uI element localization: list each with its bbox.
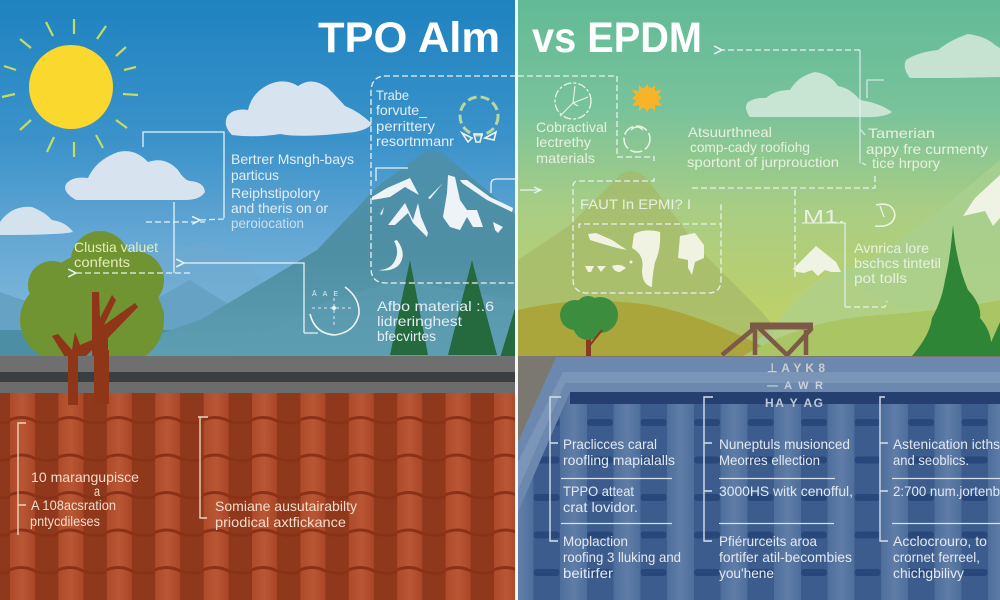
text block: Clustia: Clustia valuet: [74, 239, 158, 255]
callout: FAUT in EPMI: FAUT In EPMI? I: [580, 196, 691, 212]
text block: Atsuurthneal: comp-cady roofiohg: [690, 139, 810, 155]
roof edge: [0, 356, 516, 393]
cloud: far left: [0, 207, 73, 235]
item: Astenication: Astenication icths: [893, 436, 1000, 452]
icon: timer: [875, 204, 895, 226]
icon: sun: [2, 19, 138, 157]
item: Moplaction: Moplaction: [563, 533, 628, 549]
text block: Cobractival: lectrethy: [536, 134, 591, 150]
note: Somiane: priodical axtfickance: [215, 514, 346, 530]
item: Moplaction: beitirfer: [563, 565, 613, 581]
item: Astenication: [893, 436, 1000, 468]
text block: Tamerian: tice hrpory: [872, 155, 940, 171]
title: vs EPDM: vs EPDM: [532, 14, 702, 62]
roof base: [518, 356, 1000, 600]
cloud: centre: [746, 72, 892, 117]
hills: [518, 300, 1000, 358]
note: marangupisce: pntycdileses: [30, 513, 100, 529]
text block: Afbo material: [377, 298, 494, 344]
panel: EPDM side: [518, 0, 1000, 358]
item: Acclocrouro: crornet ferreel,: [893, 549, 980, 565]
snow caps: [372, 175, 513, 237]
icon: gauge: [310, 287, 359, 335]
roof top bands: [518, 357, 1000, 512]
small tree: [560, 296, 618, 358]
item: Pfiérurceits: you'hene: [719, 565, 774, 581]
label: M1.: M1.: [803, 207, 845, 227]
bracket: right note: [198, 417, 208, 518]
callout text: Trabe: Trabe: [376, 87, 409, 103]
column 1: [550, 397, 681, 581]
sky background: [518, 0, 1000, 358]
second pine: [985, 322, 1000, 356]
snowy peak: [963, 175, 1000, 226]
note: marangupisce: 10 marangupisce: [31, 469, 139, 485]
text block: Tamerian: Tamerian: [868, 125, 935, 141]
item: Acclocrouro: chichgbilivy: [893, 565, 964, 581]
text block: Clustia: [74, 239, 158, 270]
panel: blue roof: [518, 356, 1000, 600]
text block: Tamerian: appy fre curmenty: [866, 141, 988, 157]
text block: Afbo material: lidreringhest: [377, 313, 462, 329]
pine trees: [390, 260, 516, 358]
cloud: top centre: [226, 81, 372, 136]
bracket: [550, 397, 561, 541]
bracket: left note: [18, 423, 26, 535]
faded roof label: [765, 361, 825, 410]
note: marangupisce: a: [94, 483, 100, 499]
background mountains: [518, 160, 1000, 358]
item: Pfiérurceits: [719, 533, 852, 581]
divider: [561, 478, 672, 524]
cloud: top right: [905, 34, 1000, 78]
centre divider: [515, 0, 518, 600]
dashed callout frame: [371, 76, 516, 283]
callout text: Trabe: [376, 87, 454, 149]
connector lines: [76, 132, 515, 333]
item: Moplaction: roofing 3 lluking and: [563, 549, 681, 565]
text block: Atsuurthneal: Atsuurthneal: [688, 124, 772, 140]
slate field: [518, 392, 1000, 600]
icon: small circle: [624, 126, 650, 152]
text block: Clustia: confents: [74, 254, 130, 270]
text block: Tamerian: [866, 125, 988, 171]
item: TPPO: [563, 483, 638, 515]
text block: Bertrer: peroiocation: [231, 215, 304, 231]
large mountain: [123, 150, 516, 358]
text block: Cobractival: [536, 119, 607, 166]
tile field: [0, 392, 516, 600]
cloud: middle left: [65, 151, 205, 200]
text block: Bertrer: particus: [231, 167, 279, 183]
callout text: Trabe: perrittery: [376, 118, 435, 134]
text block: Cobractival: Cobractival: [536, 119, 607, 135]
icon: sun orange: [632, 84, 662, 112]
text block: Atsuurthneal: sportont of jurprouction: [687, 154, 839, 170]
text block: Afbo material: Afbo material :.6: [377, 298, 494, 314]
icon: clock sketch: [555, 83, 591, 119]
bracket: [704, 397, 713, 541]
callout text: Trabe: resortnmanr: [376, 133, 454, 149]
text block: Cobractival: materials: [536, 150, 595, 166]
tree: [20, 231, 164, 405]
faded roof label: HA Y AG: [765, 396, 823, 410]
text block: Bertrer: [231, 151, 354, 231]
item: Nuneptuls: Meorres ellection: [719, 452, 820, 468]
item: Nuneptuls: [719, 436, 850, 468]
text block: Bertrer: and theris on or: [231, 200, 328, 216]
note: Somiane: Somiane ausutairabilty: [215, 498, 357, 514]
title: TPO Alm: TPO Alm: [318, 14, 500, 62]
note: marangupisce: A 108acsration: [31, 497, 116, 513]
note: Somiane: [215, 498, 357, 530]
large pine tree: [912, 225, 991, 356]
item: Praclicces: [563, 436, 675, 468]
text block: Afbo material: bfecvirtes: [377, 328, 436, 344]
sky background: [0, 0, 516, 358]
callout: FAUT in EPMI: [573, 178, 721, 293]
callout text: Trabe: forvute_: [376, 102, 427, 118]
lower left slate fill: [518, 392, 570, 510]
icon: gauge: Ā A E: [312, 290, 338, 298]
item: Pfiérurceits: Pfiérurceits aroa: [719, 533, 817, 549]
distant mountains: [0, 240, 340, 358]
divider: [719, 478, 835, 524]
item: Praclicces: roofling mapialalls: [563, 452, 675, 468]
item: 3000HS: 3000HS witk cenofful,: [719, 483, 853, 499]
panel: TPO side: [0, 0, 516, 405]
item: TPPO: TPPO atteat: [563, 483, 634, 499]
icon: snowy mountain: [793, 246, 841, 276]
tree trunks over the roof edge: [68, 350, 109, 405]
divider: [892, 478, 1000, 524]
item: TPPO: crat lovidor.: [563, 499, 638, 515]
bracket: [880, 397, 888, 541]
item: Acclocrouro: [893, 533, 987, 581]
icon: crescent: [378, 240, 403, 270]
text block: Bertrer: Bertrer Msngh-bays: [231, 151, 354, 167]
icons: white map shapes: [585, 230, 704, 287]
column 3: [880, 397, 1000, 581]
item: Praclicces: Praclicces caral: [563, 436, 657, 452]
text block: Bertrer: Reiphstipolory: [231, 185, 320, 201]
bridge: [722, 326, 813, 355]
text block: Avnrica: pot tolls: [854, 270, 907, 286]
faded roof label: — A W R: [767, 380, 823, 392]
text block: Avnrica: bschcs tintetil: [854, 255, 941, 271]
connector lines: [518, 50, 887, 307]
mountain lower shade: [220, 280, 516, 358]
panel: red tile roof: [0, 350, 516, 600]
item: Acclocrouro: Acclocrouro, to: [893, 533, 987, 549]
text block: Avnrica: [854, 240, 941, 286]
text block: Atsuurthneal: [687, 124, 839, 170]
text block: Avnrica: Avnrica lore: [854, 240, 929, 256]
icon: wreath: [460, 97, 498, 142]
item: Astenication: and seoblics.: [893, 452, 969, 468]
item: Nuneptuls: Nuneptuls musionced: [719, 436, 850, 452]
faded roof label: ⊥ A Y K 8: [767, 361, 825, 375]
note: marangupisce: [30, 469, 139, 529]
item: Moplaction: [563, 533, 681, 581]
column 2: [704, 397, 853, 581]
item: Pfiérurceits: fortifer atil-becombies: [719, 549, 852, 565]
